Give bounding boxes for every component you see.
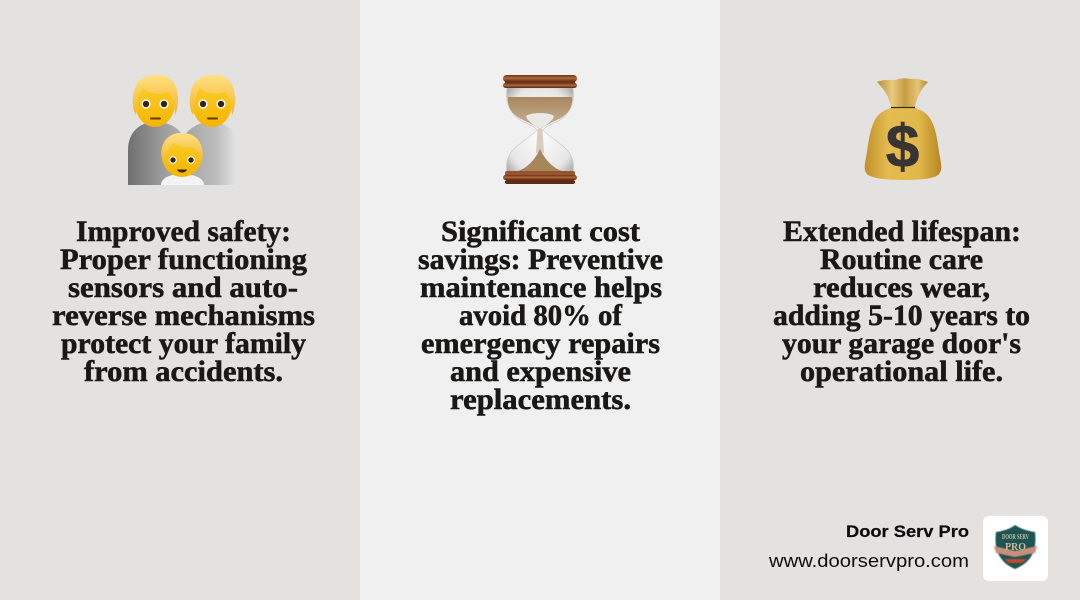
- brand name: Door Serv Pro: [846, 522, 969, 541]
- panel: improved safety: [0, 0, 360, 600]
- heading: improved safety text: from accidents.: [84, 355, 283, 388]
- heading: extended lifespan text: adding 5-10 years to: [773, 299, 1030, 332]
- logo badge: PRO: [1005, 542, 1026, 553]
- heading: cost savings text: and expensive: [450, 355, 631, 388]
- heading: cost savings text: savings: Preventive: [418, 243, 663, 276]
- heading: improved safety text: protect your family: [61, 327, 306, 360]
- logo badge: [983, 516, 1048, 581]
- icon: money bag: $: [886, 113, 919, 180]
- icon: money bag: [865, 78, 941, 180]
- website url: www.doorservpro.com: [768, 551, 969, 571]
- heading: cost savings text: [418, 215, 663, 416]
- heading: cost savings text: Significant cost: [441, 215, 640, 248]
- heading: cost savings text: emergency repairs: [421, 327, 660, 360]
- panel: extended lifespan: [720, 0, 1080, 600]
- heading: extended lifespan text: Routine care: [820, 243, 983, 276]
- heading: cost savings text: avoid 80% of: [459, 299, 623, 332]
- heading: extended lifespan text: operational life.: [800, 355, 1003, 388]
- heading: extended lifespan text: reduces wear,: [813, 271, 990, 304]
- logo badge: DOOR SERV: [1002, 533, 1029, 541]
- heading: improved safety text: reverse mechanisms: [52, 299, 315, 332]
- heading: improved safety text: [52, 215, 315, 388]
- icon: family emoji: [128, 75, 238, 185]
- heading: improved safety text: Proper functioning: [60, 243, 307, 276]
- heading: cost savings text: replacements.: [450, 383, 631, 416]
- heading: extended lifespan text: [773, 215, 1030, 388]
- heading: cost savings text: maintenance helps: [420, 271, 662, 304]
- heading: improved safety text: Improved safety:: [76, 215, 291, 248]
- panel: cost savings: [360, 0, 720, 600]
- heading: extended lifespan text: Extended lifespan:: [783, 215, 1021, 248]
- heading: improved safety text: sensors and auto-: [68, 271, 298, 304]
- heading: extended lifespan text: your garage door's: [782, 327, 1021, 360]
- icon: hourglass: [503, 75, 577, 184]
